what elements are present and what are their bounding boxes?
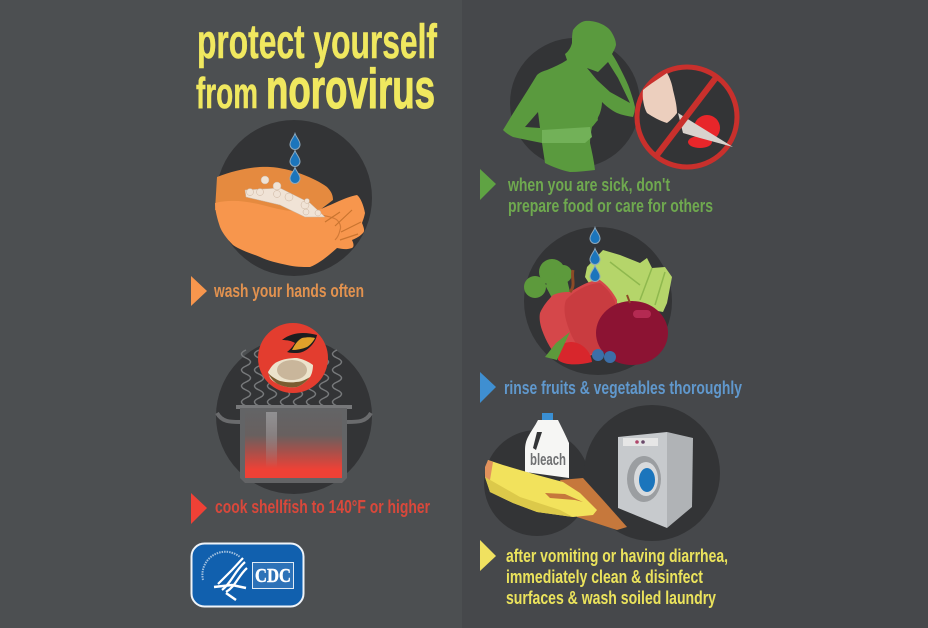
caption: cook shellfish: cook shellfish to 140°F or higher	[215, 497, 430, 517]
icon: water drops	[590, 228, 600, 282]
title	[196, 16, 438, 120]
caption: after vomiting: surfaces & wash soiled laundry	[506, 588, 716, 608]
icon: hands	[215, 167, 365, 267]
icon: steam	[242, 350, 342, 406]
caption: when you are sick: prepare food or care for others	[508, 196, 713, 216]
panel: cook shellfish	[216, 323, 372, 494]
caption: cook shellfish	[191, 493, 430, 524]
icon: pot	[217, 405, 371, 483]
icon: wash hands circle	[216, 120, 372, 276]
icon: cloth	[560, 478, 627, 530]
panel: rinse fruit	[524, 227, 672, 375]
title: norovirus	[266, 57, 435, 120]
icon: washing machine	[618, 432, 693, 528]
caption: rinse fruits: rinse fruits & vegetables thoroughly	[504, 378, 742, 398]
caption: when you are sick: when you are sick, don't	[507, 175, 670, 195]
icon: HHS seal	[202, 552, 247, 600]
icon: red apple	[540, 280, 617, 360]
caption: when you are sick	[480, 169, 713, 216]
caption: wash your hands often	[191, 276, 364, 306]
icon: cleaning circle	[484, 430, 590, 536]
caption: after vomiting: after vomiting or having diarrhea,	[506, 546, 728, 566]
icon: woman's arm	[542, 127, 592, 143]
icon: bleach bottle	[525, 413, 569, 478]
icon: lettuce	[585, 250, 672, 312]
panel: wash hands	[215, 120, 372, 276]
icon: soap foam	[245, 176, 325, 217]
caption: rinse fruits	[480, 372, 742, 403]
icon: dark apple	[596, 301, 668, 365]
caption: after vomiting: immediately clean & disinfect	[506, 567, 703, 587]
icon: fruit circle	[524, 227, 672, 375]
panel: when sick	[503, 21, 737, 172]
panel: clean and launder	[484, 405, 720, 541]
icon: shellfish	[258, 323, 328, 393]
icon: broccoli	[524, 259, 572, 298]
title: from	[196, 69, 258, 118]
icon: yellow glove	[485, 460, 597, 517]
icon: blueberries	[592, 349, 616, 363]
icon: pot circle	[216, 338, 372, 494]
icon: water drops	[290, 134, 300, 184]
icon: strawberry	[558, 342, 592, 364]
icon: no food preparation	[637, 67, 737, 167]
icon: bleach bottle: bleach	[530, 450, 566, 469]
icon: CDC mark: CDC	[255, 565, 291, 587]
icon: sick circle	[510, 38, 640, 168]
caption: wash your hands often: wash your hands often	[213, 281, 364, 301]
title: protect yourself	[197, 16, 438, 69]
logo: HHS and CDC	[192, 544, 304, 606]
icon: laundry circle	[584, 405, 720, 541]
caption: after vomiting	[480, 540, 728, 608]
icon: sick woman	[503, 21, 635, 172]
